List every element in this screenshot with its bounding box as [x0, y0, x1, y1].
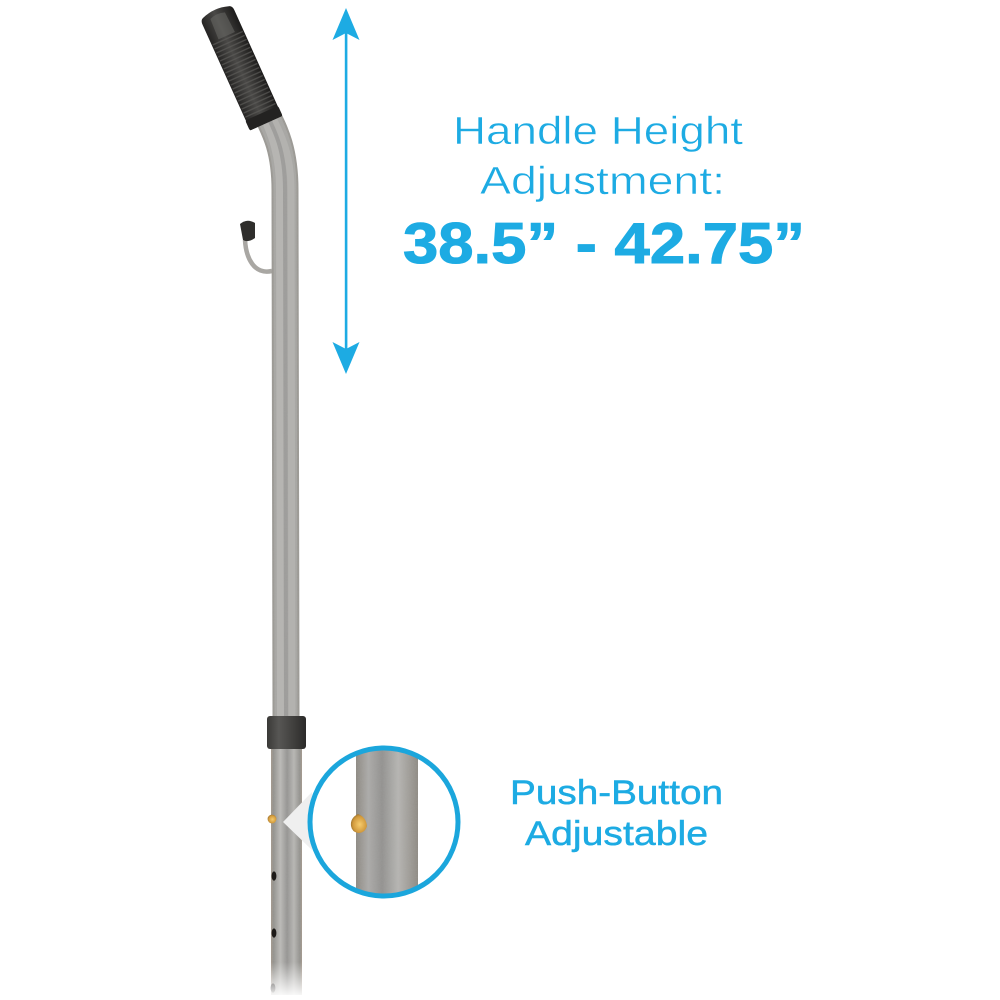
product: walker leg	[199, 2, 310, 998]
upper tube	[263, 112, 292, 716]
lower tube	[271, 745, 302, 995]
adjustment button	[268, 815, 276, 823]
value: height range: 38.5” - 42.75”	[403, 212, 805, 276]
label: push-button adjustable	[510, 774, 723, 853]
label: push-button adjustable: Push-Button	[510, 774, 723, 812]
collar	[267, 716, 306, 749]
adjustment holes	[271, 871, 276, 993]
heading: handle height adjustment: Handle Height	[453, 110, 743, 153]
hand grip	[199, 2, 283, 131]
arrow: height range	[332, 8, 360, 374]
icon: magnified button	[351, 814, 367, 833]
heading: handle height adjustment: Adjustment:	[480, 160, 725, 203]
icon: hook	[240, 221, 272, 272]
callout: zoomed button detail	[310, 745, 458, 900]
tube fade	[265, 962, 310, 998]
callout pointer	[283, 792, 312, 850]
heading: handle height adjustment	[453, 110, 743, 203]
label: push-button adjustable: Adjustable	[525, 815, 708, 853]
